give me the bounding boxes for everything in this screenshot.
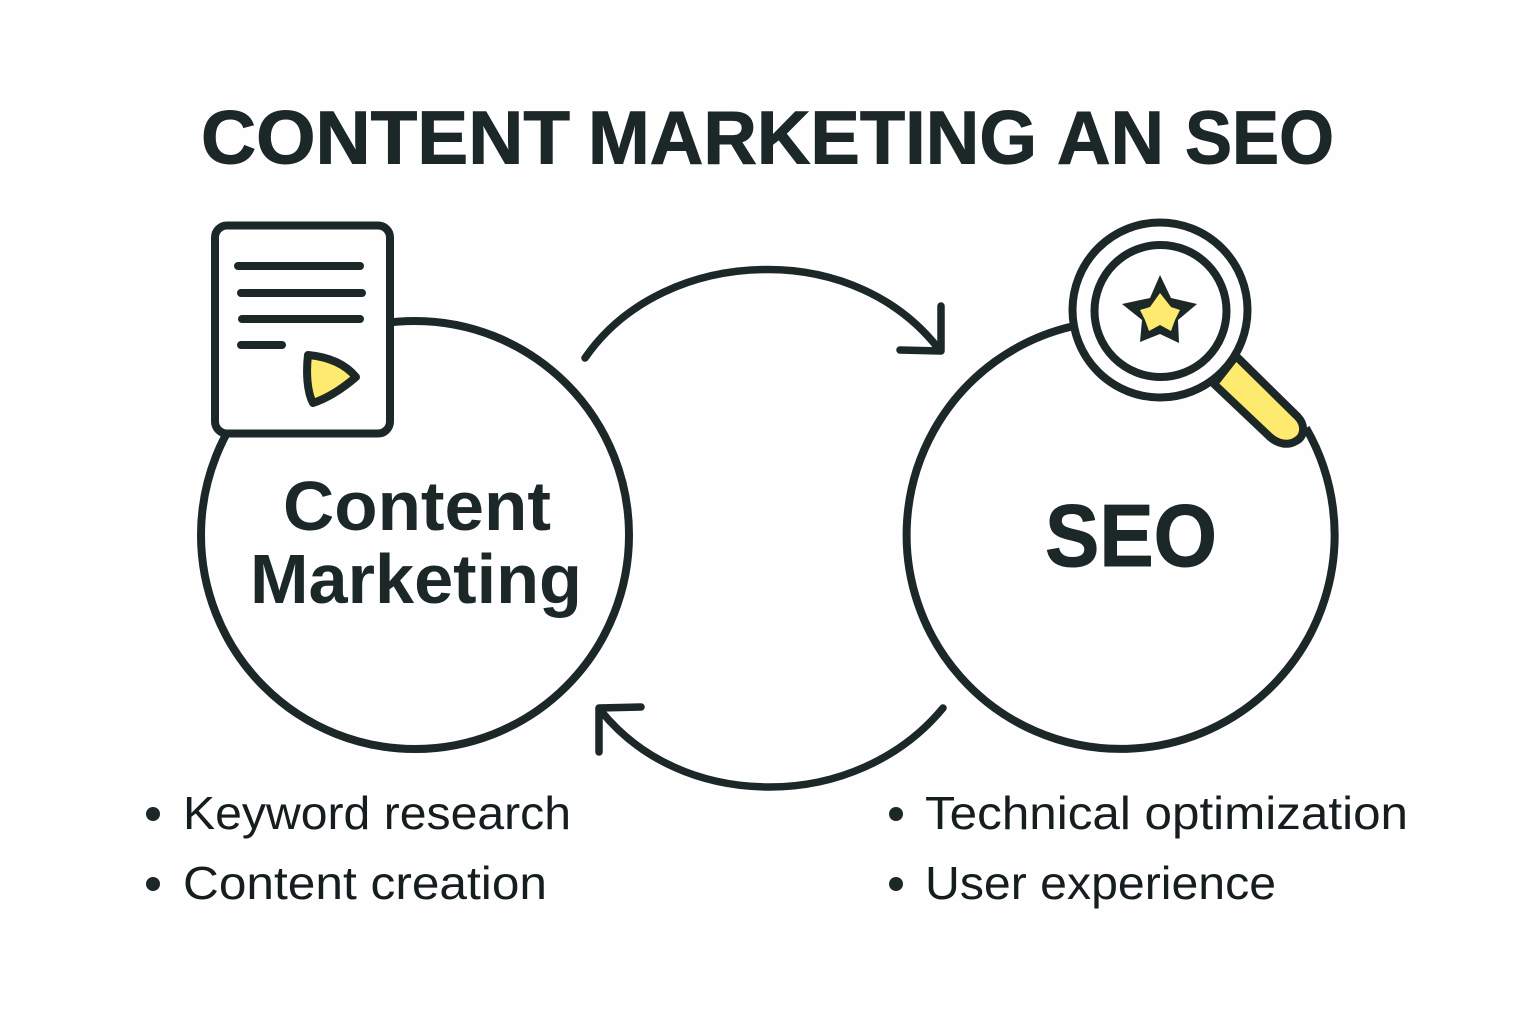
heading: content marketing: Marketing <box>250 540 582 618</box>
heading: seo: SEO <box>1045 486 1217 585</box>
list: seo points: Technical optimization <box>925 787 1408 839</box>
list: seo points <box>889 787 1408 909</box>
list: content marketing points: Keyword research <box>183 787 571 839</box>
heading: content marketing: Content <box>283 467 551 545</box>
title: SEO <box>1185 96 1334 180</box>
title <box>201 96 1334 180</box>
heading: content marketing <box>250 467 582 618</box>
arrow: seo to content marketing <box>599 707 943 787</box>
title: AN <box>1057 96 1164 180</box>
list: content marketing points <box>146 787 571 909</box>
arrow: content marketing to seo <box>585 270 941 358</box>
icon: document <box>215 226 390 434</box>
list: seo points: User experience <box>925 857 1276 909</box>
title: MARKETING <box>588 96 1037 180</box>
list: content marketing points: Content creation <box>183 857 547 909</box>
panel: seo circle <box>907 326 1335 749</box>
title: CONTENT <box>201 96 570 180</box>
icon: magnifying glass with star <box>1072 222 1303 444</box>
panel: content marketing circle <box>201 321 629 749</box>
